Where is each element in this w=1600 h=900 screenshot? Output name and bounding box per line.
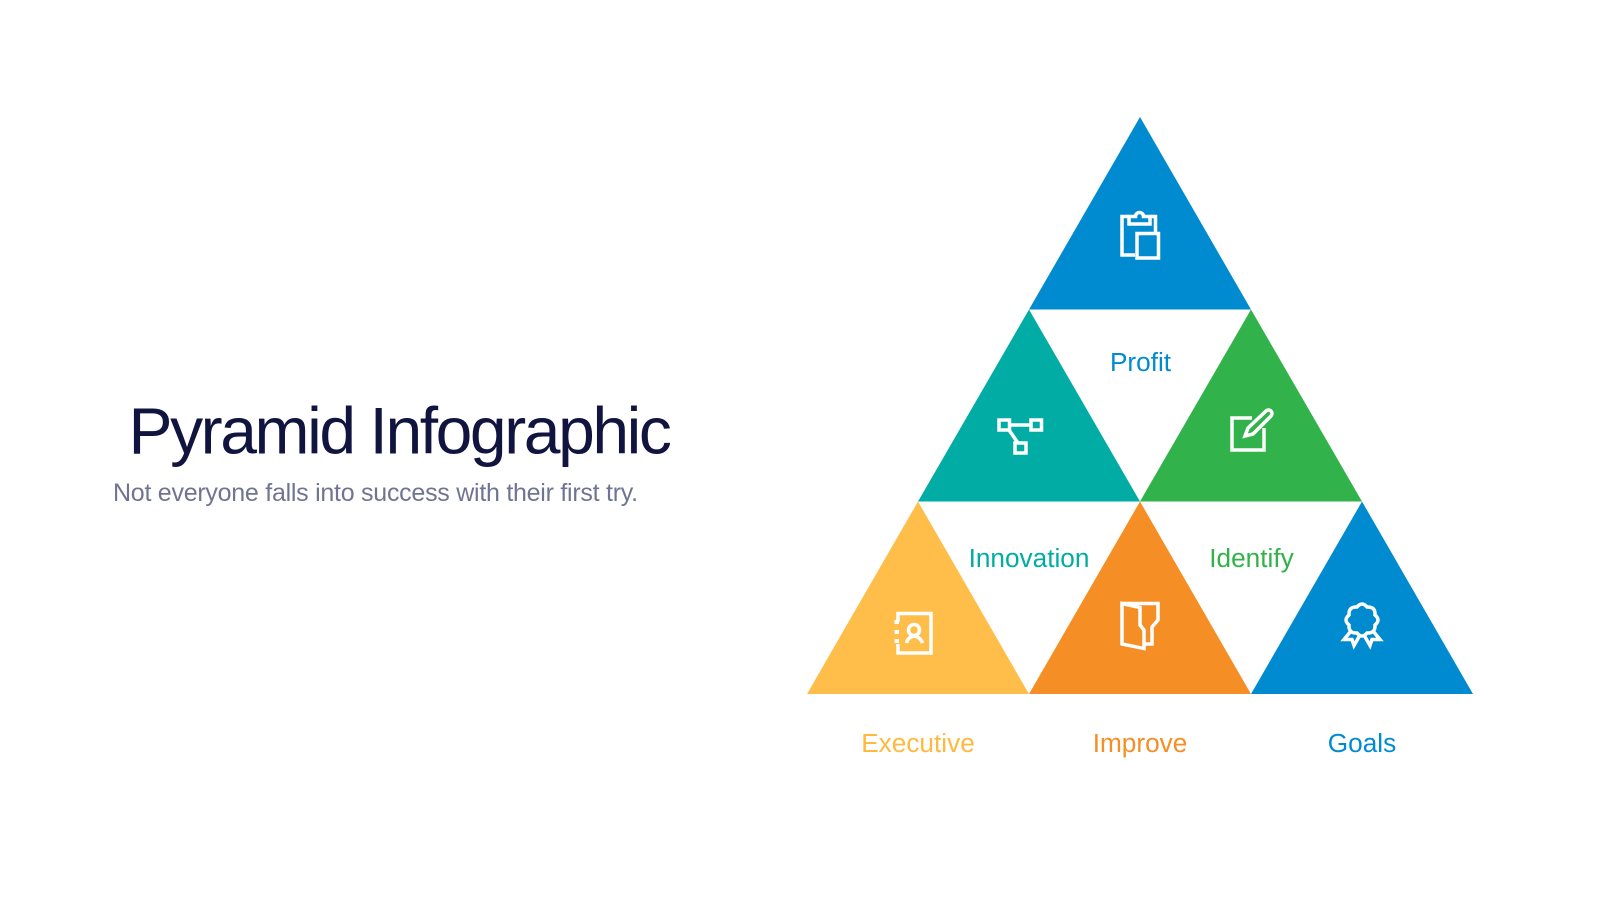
icon: address book [894, 614, 931, 653]
label: Profit: Profit [1110, 347, 1172, 377]
subtitle: Not everyone falls into success with their first try. [113, 479, 638, 507]
icon: node diagram [999, 420, 1042, 453]
triangle: bottom right [1251, 502, 1473, 694]
label: Identify: Identify [1209, 543, 1295, 573]
icon: pencil and note [1232, 410, 1272, 450]
triangle: top [1029, 117, 1251, 310]
label: Goals: Goals [1328, 728, 1396, 758]
triangle: middle right [1140, 310, 1362, 502]
pyramid [807, 117, 1473, 694]
icon: open door [1122, 604, 1158, 648]
label: Innovation: Innovation [969, 543, 1089, 573]
icon: medal [1344, 604, 1380, 646]
title: Pyramid Infographic [128, 394, 671, 468]
label: Executive: Executive [861, 728, 975, 758]
triangle: bottom centre [1029, 502, 1251, 694]
icon: clipboard [1122, 212, 1158, 258]
label: Improve: Improve [1093, 728, 1187, 758]
triangle: bottom left [807, 502, 1029, 694]
triangle: middle left [918, 310, 1140, 502]
